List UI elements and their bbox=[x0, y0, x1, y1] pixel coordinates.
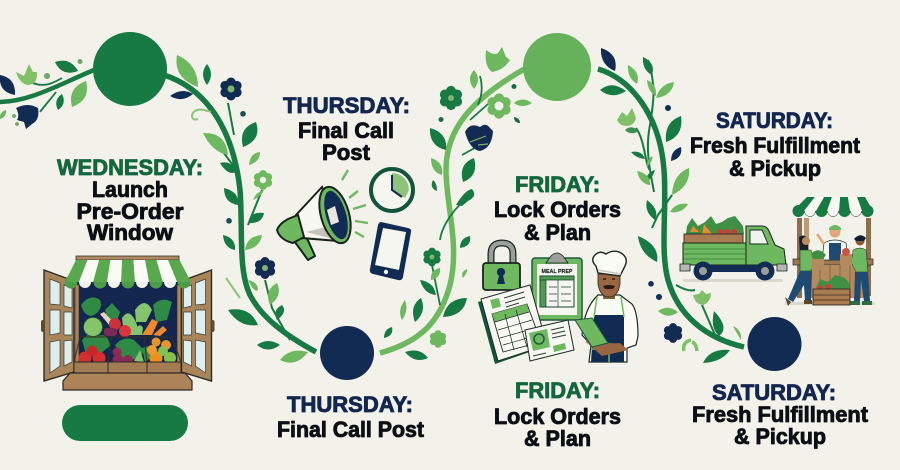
eyes bbox=[603, 278, 615, 280]
purple produce bbox=[112, 354, 124, 366]
hair bbox=[854, 235, 866, 241]
heading: Saturday top bbox=[690, 108, 861, 181]
recipe button bbox=[553, 343, 566, 352]
heading: Thursday bottom bbox=[277, 392, 425, 442]
awning scallops bbox=[64, 276, 190, 288]
awning white scallops bbox=[79, 276, 176, 288]
phone screen bbox=[375, 228, 406, 270]
icon: market stall bbox=[785, 197, 875, 306]
clip bbox=[546, 253, 568, 263]
stall awning green stripes bbox=[793, 197, 873, 211]
heading: Friday top: FRIDAY: bbox=[515, 172, 600, 197]
jeans bbox=[854, 272, 870, 301]
beet and tomatoes bbox=[100, 312, 116, 326]
handle bbox=[292, 236, 315, 260]
truck bed bbox=[683, 243, 746, 265]
icon: planning sheets bbox=[478, 285, 574, 364]
description line 3: Window bbox=[87, 220, 174, 245]
front wheel bbox=[756, 262, 774, 280]
light flower top bbox=[617, 108, 636, 126]
ground shadow bbox=[683, 279, 783, 282]
heading: Thursday top bbox=[283, 93, 410, 165]
neck bbox=[603, 290, 615, 299]
shackle bbox=[491, 243, 513, 264]
heading: Saturday bottom bbox=[692, 380, 869, 449]
sound rays bbox=[342, 170, 368, 237]
clock wedge bbox=[392, 173, 409, 198]
crate bbox=[684, 234, 743, 244]
cab window bbox=[750, 230, 768, 244]
dots bbox=[12, 59, 83, 126]
vendor apron bbox=[829, 243, 841, 260]
right shutter bbox=[182, 270, 214, 381]
face bbox=[802, 237, 810, 245]
light leaves bbox=[400, 70, 532, 320]
dark leaf bottom bbox=[703, 350, 730, 363]
light leaves bbox=[628, 65, 741, 340]
torso bbox=[582, 295, 638, 362]
description: Lock Orders bbox=[494, 404, 621, 429]
dark flower lower bbox=[423, 248, 441, 266]
text lines bbox=[504, 292, 525, 307]
crate body bbox=[813, 289, 850, 305]
icon: delivery truck bbox=[680, 216, 787, 282]
wood panel bbox=[810, 265, 867, 298]
cone shadow bbox=[306, 226, 337, 240]
description: Final Call bbox=[298, 118, 394, 143]
heading: Friday top bbox=[494, 172, 621, 245]
back cap bbox=[277, 215, 304, 243]
heading: Saturday bottom: SATURDAY: bbox=[712, 380, 836, 405]
dark leaves bbox=[384, 128, 475, 360]
recipe dish bbox=[534, 334, 544, 344]
icon: padlock bbox=[483, 243, 520, 290]
heading: Saturday top: SATURDAY: bbox=[716, 108, 833, 133]
bag bbox=[840, 254, 852, 265]
produce load bbox=[686, 216, 744, 234]
slats bbox=[813, 295, 850, 300]
description: Final Call Post bbox=[277, 417, 425, 442]
crate with greens bbox=[813, 275, 850, 305]
shoes bbox=[850, 301, 872, 305]
heading: Thursday bottom: THURSDAY: bbox=[287, 392, 413, 417]
navy leaves bbox=[601, 48, 681, 161]
dark leaf under flower bbox=[625, 127, 639, 133]
awning rail bbox=[76, 256, 179, 260]
apron straps bbox=[591, 297, 627, 362]
description: Fresh Fulfillment bbox=[692, 402, 869, 427]
lime greens bbox=[164, 352, 176, 364]
node: navy circle Thursday bbox=[320, 326, 374, 380]
bell opening bbox=[319, 188, 353, 242]
table header and lines bbox=[540, 276, 574, 307]
bag bbox=[812, 257, 824, 270]
awning stripes green bbox=[65, 260, 191, 282]
stall awning white stripes bbox=[804, 197, 862, 211]
crate produce bbox=[78, 352, 92, 364]
description: Launch bbox=[92, 177, 168, 202]
navy flower bbox=[220, 77, 242, 101]
face bbox=[598, 274, 620, 297]
stall awning green scallops bbox=[792, 205, 874, 217]
table bbox=[492, 304, 541, 352]
icon: phone bbox=[370, 222, 411, 280]
navy tulip bbox=[465, 125, 493, 151]
light flower lower bbox=[430, 330, 446, 348]
heading: Thursday top: THURSDAY: bbox=[283, 93, 410, 118]
light leaves bbox=[176, 55, 308, 363]
moustache bbox=[603, 285, 615, 289]
vine: right arch bbox=[598, 48, 744, 363]
shirt bbox=[842, 248, 868, 272]
navy tulip bbox=[16, 105, 38, 129]
node: light green circle bbox=[523, 33, 591, 101]
crate rims bbox=[74, 337, 181, 362]
dark curl leaf bbox=[456, 189, 474, 206]
ground shadow bbox=[785, 302, 875, 305]
light crate greens bbox=[134, 350, 144, 362]
shoes bbox=[785, 297, 812, 306]
carrots bbox=[142, 319, 167, 336]
navy flower lower bbox=[255, 257, 275, 279]
lock body bbox=[483, 263, 520, 290]
stall awning scallops bbox=[804, 206, 862, 216]
left shutter bbox=[41, 270, 74, 381]
window sill bbox=[63, 373, 192, 390]
chassis bbox=[695, 265, 763, 272]
pill button bbox=[62, 405, 188, 441]
dark leaves bbox=[600, 57, 723, 336]
bell bbox=[314, 183, 356, 247]
bag produce bbox=[842, 248, 850, 256]
node: navy circle Saturday bbox=[748, 317, 802, 371]
navy interior bbox=[77, 282, 179, 372]
jeans bbox=[788, 271, 812, 302]
description line 2: & Pickup bbox=[734, 424, 826, 449]
icon: clock bbox=[371, 169, 413, 211]
light tulip bbox=[486, 47, 510, 72]
vendor bbox=[817, 225, 848, 260]
checkbox bbox=[490, 298, 501, 309]
icon: clipboard bbox=[532, 253, 582, 320]
table header bbox=[492, 304, 529, 322]
description line 2: & Plan bbox=[524, 426, 591, 451]
vine: center-left light stem bbox=[380, 47, 532, 360]
description: Lock Orders bbox=[494, 197, 621, 222]
vine: top left branch bbox=[0, 59, 94, 129]
light tulip bbox=[16, 64, 37, 85]
cab bbox=[746, 226, 786, 265]
mouth highlight bbox=[327, 206, 339, 225]
awning stripes white bbox=[79, 260, 177, 282]
light curls bbox=[684, 340, 697, 351]
tomatoes bbox=[717, 229, 737, 235]
crates bbox=[74, 362, 181, 373]
label: MEAL PREP bbox=[542, 269, 573, 275]
lettuce bbox=[84, 318, 102, 336]
light flower bbox=[254, 170, 272, 190]
heading: Wednesday bbox=[57, 155, 203, 245]
light leaves bbox=[0, 81, 87, 119]
apron bbox=[591, 315, 624, 362]
forearm bbox=[586, 333, 628, 356]
table bbox=[540, 276, 574, 307]
navy leaf bbox=[170, 91, 193, 99]
greens bbox=[81, 297, 172, 362]
inner post bbox=[804, 218, 809, 260]
light flower bottom bbox=[693, 290, 711, 305]
bumpers bbox=[680, 264, 787, 271]
vine: left arch bbox=[164, 55, 316, 363]
clipboard bbox=[575, 318, 608, 347]
vendor arm bbox=[817, 234, 824, 244]
oranges bbox=[150, 352, 162, 364]
heading: Friday bottom: FRIDAY: bbox=[515, 378, 600, 403]
description line 2: Post bbox=[322, 140, 371, 165]
recipe image bbox=[529, 329, 550, 351]
vendor shirt bbox=[822, 240, 848, 260]
grid bbox=[495, 310, 538, 350]
dots bbox=[226, 111, 246, 224]
frame posts bbox=[75, 285, 181, 372]
description line 2: & Plan bbox=[524, 220, 591, 245]
vendor cap bbox=[829, 225, 841, 230]
heading: Friday bottom bbox=[494, 378, 621, 451]
hat bbox=[593, 251, 626, 276]
hat band bbox=[598, 270, 621, 274]
top bbox=[800, 250, 815, 271]
cone bbox=[296, 187, 338, 241]
description line 2: Pre-Order bbox=[76, 199, 184, 224]
recipe lines bbox=[533, 327, 566, 356]
icon: megaphone bbox=[277, 170, 368, 260]
stall counter bbox=[793, 259, 873, 265]
description line 2: & Pickup bbox=[729, 156, 821, 181]
dark flower bbox=[440, 86, 462, 110]
carrots and tomatoes bbox=[690, 224, 712, 234]
posts bbox=[797, 218, 871, 298]
bag greens bbox=[811, 250, 826, 259]
navy leaf bbox=[0, 75, 15, 95]
dark leaves bbox=[203, 64, 284, 350]
recipe card bbox=[525, 320, 574, 361]
node: dark green circle bbox=[93, 32, 167, 106]
dots bbox=[648, 105, 671, 300]
light greens bbox=[122, 303, 152, 335]
curl bbox=[192, 110, 211, 120]
small accents bbox=[439, 84, 520, 123]
panel lines bbox=[820, 265, 860, 298]
rear wheel bbox=[694, 262, 712, 280]
keyhole bbox=[497, 268, 505, 284]
description: Fresh Fulfillment bbox=[690, 133, 861, 158]
tomato 2 bbox=[825, 284, 831, 290]
heading: Wednesday: WEDNESDAY: bbox=[57, 155, 203, 180]
customer left bbox=[785, 236, 826, 306]
home button bbox=[384, 270, 388, 274]
icon: chef bbox=[575, 251, 638, 362]
hands bbox=[392, 175, 402, 197]
tomatoes bbox=[817, 285, 823, 291]
paper bbox=[537, 264, 577, 315]
navy flower bottom bbox=[664, 323, 682, 343]
light flower bbox=[487, 93, 511, 119]
bed ribs bbox=[684, 249, 745, 259]
customer right bbox=[840, 235, 872, 305]
main sheet bbox=[481, 285, 547, 361]
leaves bbox=[55, 61, 78, 110]
light twig bbox=[226, 278, 240, 298]
icon: produce window bbox=[41, 256, 214, 390]
